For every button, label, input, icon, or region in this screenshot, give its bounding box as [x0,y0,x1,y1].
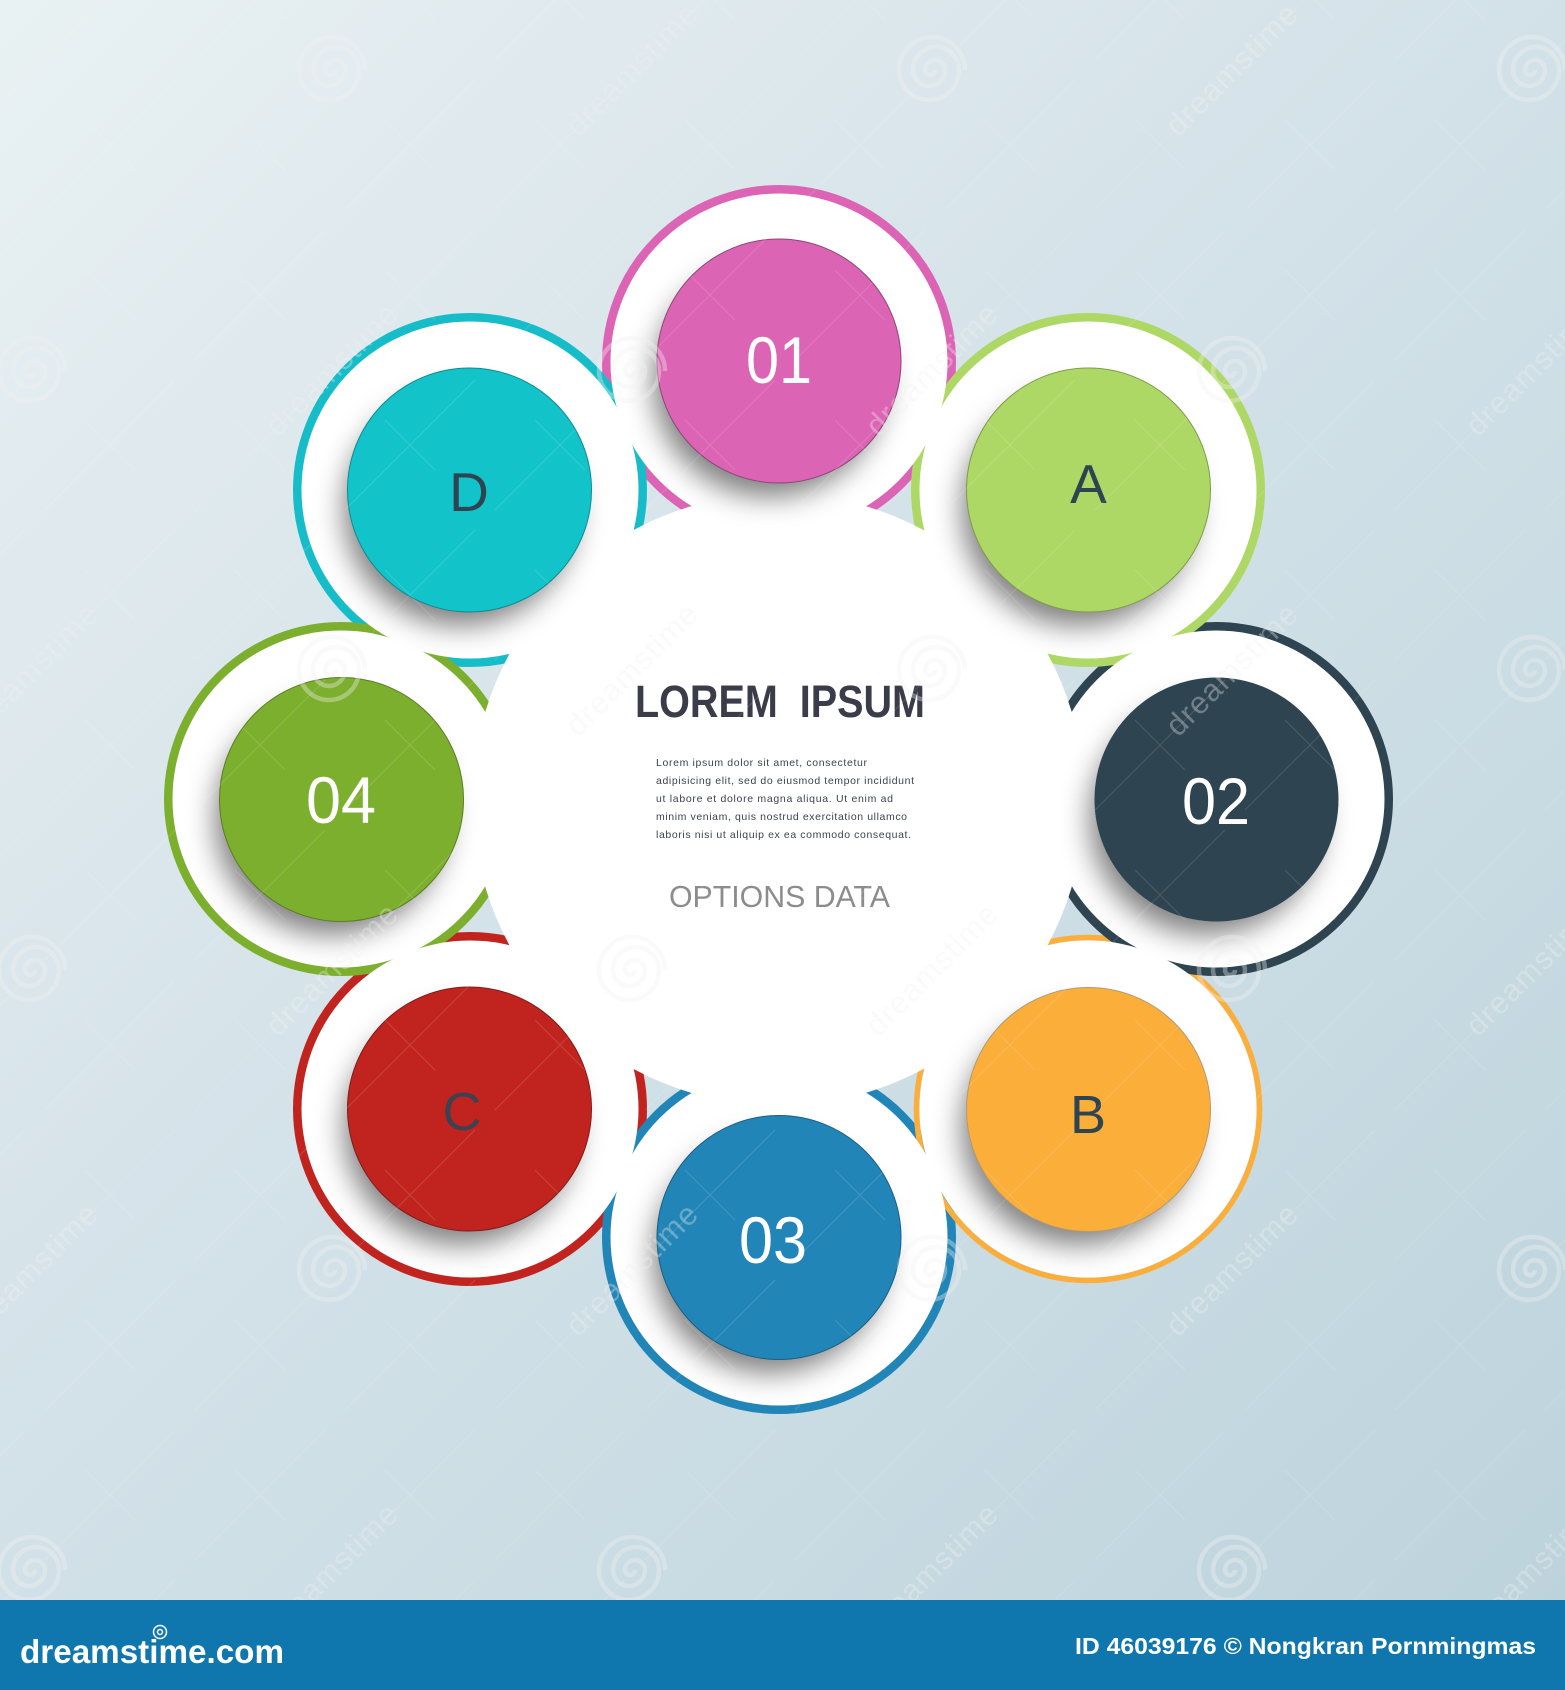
watermark wordmarks: dreamstime [258,296,405,443]
body paragraph: adipisicing elit, sed do eiusmod tempor incididunt [656,775,914,787]
watermark wordmarks: dreamstime [558,0,705,143]
label B: B [1070,1085,1106,1145]
ring: D teal [298,318,642,662]
label D: D [449,461,489,523]
disc A [966,368,1210,612]
watermark wordmarks: dreamstime [1158,596,1305,743]
watermark wordmarks: dreamstime [558,1196,705,1343]
body paragraph: laboris nisi ut aliquip ex ea commodo consequat. [656,829,911,841]
label A: A [1070,453,1107,515]
watermark wordmarks: dreamstime [858,1496,1005,1643]
watermark wordmarks: dreamstime [558,596,705,743]
label 04: 04 [306,763,376,837]
watermark wordmarks: dreamstime [858,896,1005,1043]
white disc 01 [610,194,948,530]
white disc 02 [1048,630,1384,968]
icon: logo spiral [154,1626,166,1638]
white disc A [920,322,1256,658]
subtitle: OPTIONS DATA [669,879,890,914]
label 02: 02 [1182,764,1250,838]
badge B [966,988,1210,1232]
title: LOREM IPSUM [635,676,925,727]
badge 02 [1094,678,1338,922]
soft drop shadows under coloured discs [215,265,1322,1373]
coloured outer rings [168,190,1388,1410]
footer logo wordmark: dreamstime.com [20,1633,284,1670]
footer background [0,1600,1565,1690]
body paragraph: minim veniam, quis nostrud exercitation ullamco [656,811,907,823]
badge C [348,987,592,1231]
watermark wordmarks: dreamstime [1158,0,1305,143]
label C: C [442,1082,482,1142]
ring: C red [298,936,642,1282]
body paragraph: ut labore et dolore magna aliqua. Ut enim ad [656,793,893,805]
footer band [0,1600,1565,1690]
central text block [635,676,925,914]
badge D [348,368,592,612]
white disc D [302,322,638,658]
central white disc [472,494,1084,1106]
white disc C [302,940,638,1278]
ring: B orange [916,938,1260,1280]
ring: A lime [916,318,1260,662]
body paragraph [656,757,914,841]
footer image id and credit: ID 46039176 © Nongkran Pornmingmas [1075,1633,1536,1659]
watermark wordmarks: dreamstime [1158,1196,1305,1343]
ring: 04 green [168,626,514,972]
disc 01 [657,239,901,483]
ring: 01 pink [606,190,952,534]
ring: 02 dark slate [1044,626,1388,972]
disc 04 [220,678,464,922]
watermark wordmarks: dreamstime [258,1496,405,1643]
disc B [966,988,1210,1232]
badge 03 [657,1116,901,1360]
badge A [966,368,1210,612]
disc 03 [657,1116,901,1360]
body paragraph: Lorem ipsum dolor sit amet, consectetur [656,757,868,769]
disc C [348,987,592,1231]
ring: 03 blue [606,1064,952,1410]
disc 02 [1094,678,1338,922]
watermark wordmarks: dreamstime [258,896,405,1043]
label 03: 03 [739,1203,807,1277]
disc D [348,368,592,612]
badge 01 [657,239,901,483]
white petal discs and central disc [172,194,1384,1406]
badge 04 [220,678,464,922]
white disc B [920,940,1256,1278]
watermark wordmarks: dreamstime [858,296,1005,443]
white disc 04 [172,630,510,968]
label 01: 01 [746,323,812,397]
white disc 03 [610,1068,948,1406]
